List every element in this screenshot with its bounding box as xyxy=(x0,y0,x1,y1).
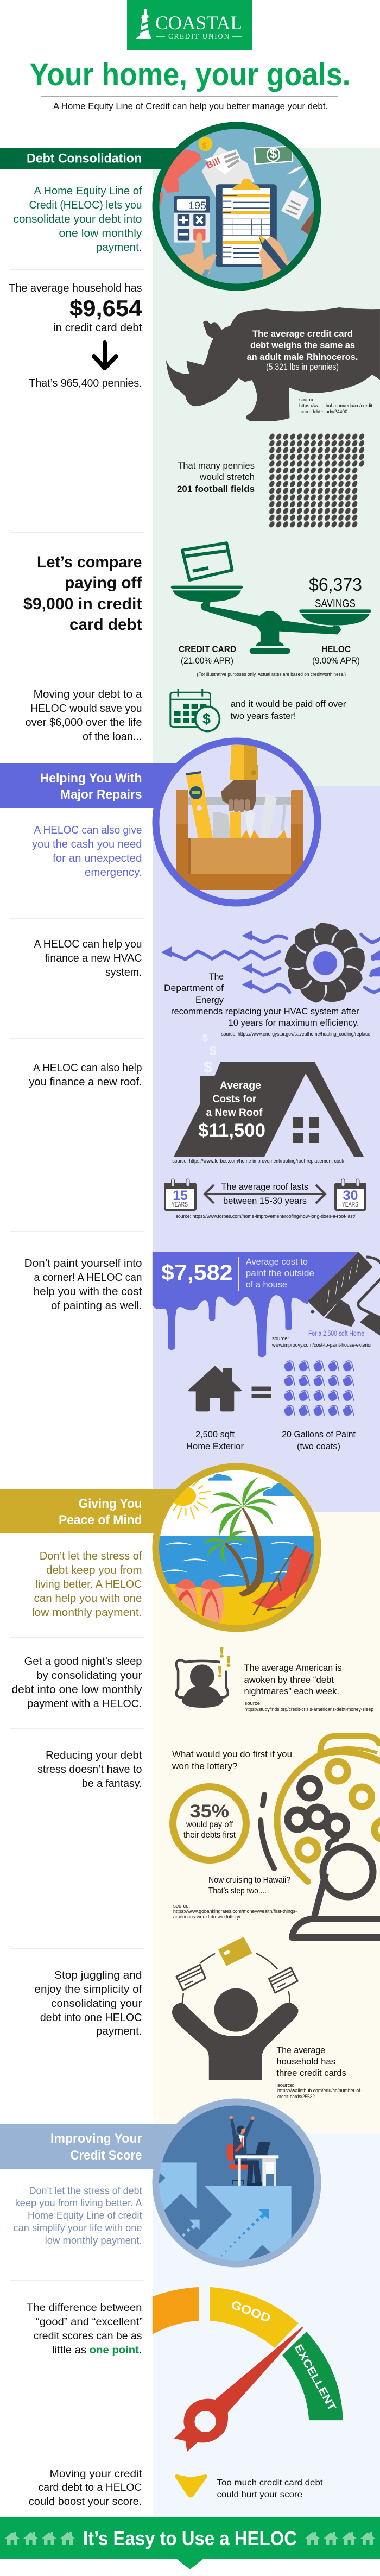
panel: major repairs background xyxy=(153,786,380,1512)
text: good versus excellent: The difference between xyxy=(27,2302,142,2314)
text: finance a new roof: you finance a new roof. xyxy=(29,1076,142,1088)
text: three credit cards: The average xyxy=(276,2045,325,2055)
section band: peace of mind xyxy=(0,1489,182,1533)
icon: calendar with dollar xyxy=(170,689,219,731)
text: reducing debt stress: Reducing your debt xyxy=(46,1749,142,1761)
illustration: balance scale: (21.00% APR) xyxy=(181,655,233,666)
source: wallethub number of cards: https://wallethub.com/edu/cc/number-of- xyxy=(277,2088,362,2094)
callout: 35 percent: 35% xyxy=(190,1801,229,1822)
title: Your home, your goals. xyxy=(29,57,351,92)
chart: credit score gauge xyxy=(153,2287,343,2452)
source: forbes roof lifespan: source: https://www.forbes.com/home-improvement/roofing/how-long-does-a-roof-last/ xyxy=(176,1214,356,1220)
text: good night's sleep: Get a good night’s sleep xyxy=(24,1655,142,1668)
text: boost your score: card debt to a HELOC xyxy=(38,2482,142,2493)
panel: peace of mind background xyxy=(153,1512,380,2133)
text: peace of mind description xyxy=(32,1550,142,1619)
arrow: roof lifespan range: The average roof lasts xyxy=(221,1182,308,1192)
text: boost your score: Moving your credit xyxy=(50,2468,142,2480)
illustration: bills and calculator in circle: Bill xyxy=(205,156,222,171)
text: HELOC intro: one low monthly xyxy=(59,227,142,239)
source: wallethub number of cards xyxy=(277,2082,362,2100)
text: stop juggling: enjoy the simplicity of xyxy=(34,1983,142,1996)
section band: it's easy to use a HELOC xyxy=(0,2517,380,2569)
icon: HVAC fan xyxy=(283,923,368,1006)
text: department of energy recommendation xyxy=(164,971,359,1028)
icon: calendar with dollar: $ xyxy=(202,711,211,727)
text: HELOC intro: A Home Equity Line of xyxy=(34,185,142,197)
arrow: roof lifespan range xyxy=(205,1182,325,1206)
illustration: house roof with cost: $11,500 xyxy=(198,1120,265,1141)
text: cruising to Hawaii xyxy=(208,1876,290,1896)
text: finance HVAC: finance a new HVAC xyxy=(45,952,142,964)
text: department of energy recommendation: Department of xyxy=(164,983,224,993)
text: let's compare: Let’s compare xyxy=(37,553,142,571)
chart: credit score gauge: GOOD xyxy=(229,2297,273,2325)
text: let's compare: $9,000 in credit xyxy=(23,595,142,613)
text: lottery question: What would you do first if you xyxy=(172,1749,292,1759)
arrow: down to pennies xyxy=(94,343,116,368)
text: department of energy recommendation: 10 years for maximum efficiency. xyxy=(228,1018,359,1028)
panel: credit score background xyxy=(153,2133,380,2519)
text: peace of mind description: Don’t let the stress of xyxy=(40,1550,142,1562)
text: house label: 2,500 sqft xyxy=(195,1429,235,1439)
text: painting: help you with the cost xyxy=(34,1285,142,1298)
source: wallethub debt study: source: xyxy=(299,397,316,403)
text: finance HVAC xyxy=(34,938,142,978)
text: football fields: That many pennies xyxy=(178,460,255,471)
text: three credit cards xyxy=(276,2045,346,2078)
text: unexpected emergency: for an unexpected xyxy=(53,852,142,864)
text: good versus excellent: credit scores can be as xyxy=(34,2330,142,2342)
text: department of energy recommendation: Energy xyxy=(195,995,224,1005)
text: HELOC intro: consolidate your debt into xyxy=(13,213,142,225)
source: forbes roof cost: source: https://www.forbes.com/home-improvement/roofing/roof-replacement-cost/ xyxy=(172,1158,344,1164)
illustration: rhino silhouette: The average credit card xyxy=(252,329,353,339)
text: paint label xyxy=(282,1429,356,1451)
text: HELOC intro: Credit (HELOC) lets you xyxy=(29,199,142,211)
panel: debt consolidation background xyxy=(153,148,380,786)
text: average household debt: $9,654 xyxy=(69,295,142,321)
source: go banking rates: source: xyxy=(173,1903,190,1909)
illustration: balance scale: CREDIT CARD xyxy=(179,644,236,654)
text: football fields: would stretch xyxy=(199,472,255,482)
text: football fields xyxy=(177,460,255,494)
icon: 30 years calendar: 30 xyxy=(343,1188,358,1203)
illustration: balance scale: (9.00% APR) xyxy=(312,655,360,666)
text: lottery question: won the lottery? xyxy=(172,1761,238,1771)
illustration: person juggling credit cards xyxy=(172,1937,298,2080)
icon: 15 years calendar xyxy=(164,1179,197,1211)
section band: peace of mind: Giving You xyxy=(79,1497,142,1511)
icon: 15 years calendar: YEARS xyxy=(172,1202,188,1208)
illustration: house roof with cost: Costs for xyxy=(213,1094,257,1105)
logo: COASTAL xyxy=(155,12,242,34)
icon: white dollar signs: $ xyxy=(202,1033,208,1044)
text: good versus excellent xyxy=(27,2302,143,2356)
section band: credit score: Improving Your xyxy=(50,2131,142,2146)
illustration: house roof with cost xyxy=(174,1062,364,1157)
text: average household debt xyxy=(9,282,142,389)
text: good night's sleep: payment with a HELOC. xyxy=(27,1697,142,1710)
illustration: paint drips and roller: Average cost to xyxy=(246,1257,308,1267)
text: finance HVAC: A HELOC can help you xyxy=(34,938,142,950)
text: unexpected emergency: you the cash you need xyxy=(32,838,142,850)
text: finance a new roof xyxy=(29,1062,142,1088)
icon: 30 years calendar: YEARS xyxy=(342,1202,358,1208)
text: house label xyxy=(186,1429,244,1451)
text: simplify your life: can simplify your life with one xyxy=(13,2222,142,2233)
text: peace of mind description: low monthly payment. xyxy=(32,1606,142,1619)
chart: credit score gauge: EXCELLENT xyxy=(292,2343,338,2413)
source: wallethub debt study: https://wallethub.com/edu/cc/credit xyxy=(299,403,372,409)
text: painting xyxy=(24,1257,142,1312)
section band: major repairs: Helping You With xyxy=(40,771,142,786)
text: unexpected emergency: A HELOC can also give xyxy=(34,824,142,836)
text: reducing debt stress: be a fantasy. xyxy=(82,1777,142,1790)
icon: house xyxy=(188,1366,242,1411)
chart: football pictogram grid xyxy=(269,433,365,528)
text: good night's sleep: by consolidating your xyxy=(36,1669,142,1682)
section band: major repairs: Major Repairs xyxy=(60,787,142,802)
source: wallethub number of cards: credit-cards/25532 xyxy=(277,2094,315,2100)
text: boost your score: could boost your score. xyxy=(29,2496,142,2508)
text: debt nightmares: awoken by three “debt xyxy=(244,1675,334,1685)
section band: it's easy to use a HELOC: It’s Easy to Use a HELOC xyxy=(83,2527,297,2549)
text: simplify your life xyxy=(13,2185,142,2246)
illustration: rhino silhouette: debt weighs the same as xyxy=(250,340,355,350)
text: painting: Don’t paint yourself into xyxy=(24,1257,142,1270)
section band: major repairs xyxy=(0,763,182,808)
text: paid off faster: and it would be paid off over xyxy=(230,699,346,709)
text: average household debt: in credit card debt xyxy=(53,321,142,334)
illustration: rhino silhouette: an adult male Rhinoceros. xyxy=(246,352,358,362)
text: let's compare xyxy=(23,553,142,634)
illustration: balance scale: SAVINGS xyxy=(315,598,356,610)
illustration: paint drips and roller: paint the outside xyxy=(246,1268,314,1278)
icon: white dollar signs: $ xyxy=(210,1044,217,1058)
source: go banking rates: https://www.gobankingrates.com/money/wealth/first-things- xyxy=(173,1909,297,1915)
text: let's compare: paying off xyxy=(65,574,142,592)
section band: debt consolidation xyxy=(0,148,182,169)
illustration: balance scale: HELOC xyxy=(321,644,351,654)
subtitle: A Home Equity Line of Credit can help you better manage your debt. xyxy=(53,101,328,111)
icon: 30 years calendar xyxy=(334,1179,366,1211)
text: boost your score xyxy=(29,2468,142,2508)
illustration: balance scale: $6,373 xyxy=(309,574,362,595)
text: department of energy recommendation: recommends replacing your HVAC system after xyxy=(171,1006,359,1016)
text: debt nightmares: The average American is xyxy=(244,1663,342,1673)
arrow: roof lifespan range: between 15-30 years xyxy=(223,1196,307,1206)
logo: CREDIT UNION xyxy=(168,32,230,40)
text: painting: a corner! A HELOC can xyxy=(34,1271,142,1284)
text: too much debt: Too much credit card debt xyxy=(217,2478,323,2487)
text: moving debt to HELOC: HELOC would save you xyxy=(30,702,142,715)
callout: 35 percent xyxy=(173,1786,246,1860)
text: HELOC intro: payment. xyxy=(96,241,142,254)
text: paint label: (two coats) xyxy=(297,1441,340,1451)
text: debt nightmares: nightmares” each week. xyxy=(244,1686,339,1696)
illustration: bills and calculator in circle: 195 xyxy=(188,200,206,212)
illustration: paint drips and roller xyxy=(153,1252,380,1357)
logo xyxy=(127,0,252,50)
source: improovy xyxy=(271,1336,372,1348)
text: simplify your life: low monthly payment. xyxy=(45,2234,142,2246)
text: department of energy recommendation: The xyxy=(209,971,224,982)
text: good versus excellent: “good” and “excellent” xyxy=(36,2316,143,2328)
text: three credit cards: three credit cards xyxy=(276,2068,346,2078)
illustration: paint drips and roller: $7,582 xyxy=(161,1261,233,1285)
text: unexpected emergency xyxy=(32,824,142,879)
text: moving debt to HELOC: of the loan... xyxy=(83,730,142,743)
illustration: rhino silhouette xyxy=(166,307,380,421)
text: house label: Home Exterior xyxy=(186,1441,244,1451)
callout: 35 percent: would pay off xyxy=(186,1820,233,1829)
section band: peace of mind: Peace of Mind xyxy=(59,1513,142,1527)
icon: white dollar signs: $ xyxy=(204,1059,212,1076)
callout: 35 percent: their debts first xyxy=(183,1830,236,1840)
text: moving debt to HELOC xyxy=(25,688,142,743)
text: stop juggling: Stop juggling and xyxy=(54,1969,142,1981)
text: simplify your life: Don’t let the stress of debt xyxy=(29,2185,142,2196)
text: simplify your life: Home Equity Line of credit xyxy=(28,2209,142,2221)
text: paint label: 20 Gallons of Paint xyxy=(282,1429,356,1439)
text: too much debt: could hurt your score xyxy=(217,2490,302,2499)
text: peace of mind description: can help you with one xyxy=(34,1592,142,1605)
icon: person on pillow with alarm marks xyxy=(176,1647,231,1708)
text: too much debt xyxy=(217,2478,323,2499)
source: improovy: www.improovy.com/cost-to-paint-house-exterior xyxy=(271,1342,372,1348)
icon: down arrow xyxy=(176,2475,206,2497)
text: let's compare: card debt xyxy=(69,616,142,634)
text: cruising to Hawaii: That’s step two.... xyxy=(208,1886,267,1896)
text: peace of mind description: debt keep you from xyxy=(46,1564,142,1576)
text: moving debt to HELOC: Moving your debt to a xyxy=(34,688,142,700)
text: finance HVAC: system. xyxy=(105,966,142,978)
text: peace of mind description: living better. A HELOC xyxy=(36,1578,142,1590)
text: simplify your life: keep you from living better. A xyxy=(15,2197,142,2208)
icon: equals sign xyxy=(252,1387,271,1398)
icon: white dollar signs xyxy=(202,1033,217,1076)
illustration: bills and calculator in circle: $ xyxy=(270,147,277,161)
chart: paint cans pictogram xyxy=(283,1360,357,1419)
text: reducing debt stress: stress doesn’t have to xyxy=(37,1763,142,1776)
text: paid off faster: two years faster! xyxy=(230,711,296,721)
illustration: house roof with cost: Average xyxy=(220,1080,261,1091)
source: wallethub number of cards: source: xyxy=(277,2082,294,2088)
icon: 15 years calendar: 15 xyxy=(173,1188,188,1203)
illustration: paint drips and roller: of a house xyxy=(246,1279,287,1290)
text: lottery question xyxy=(172,1749,292,1771)
illustration: house roof with cost: a New Roof xyxy=(206,1107,263,1119)
text: good versus excellent: little as one point. xyxy=(52,2344,142,2356)
section band: credit score: Credit Score xyxy=(71,2148,142,2163)
illustration: businessman on rising arrows xyxy=(156,2102,318,2264)
source: study finds xyxy=(244,1701,373,1713)
section band: credit score xyxy=(0,2124,182,2169)
text: debt nightmares xyxy=(244,1663,342,1696)
text: moving debt to HELOC: over $6,000 over the life xyxy=(25,716,142,729)
illustration: rhino silhouette: (5,321 lbs in pennies) xyxy=(266,362,339,372)
text: finance a new roof: A HELOC can also help xyxy=(33,1062,142,1074)
text: reducing debt stress xyxy=(37,1749,142,1790)
text: paid off faster xyxy=(230,699,346,721)
source: go banking rates xyxy=(173,1903,297,1920)
illustration: toolbox in circle xyxy=(156,741,318,903)
text: good night's sleep xyxy=(11,1655,142,1710)
text: stop juggling: consolidating your xyxy=(51,1997,142,2010)
text: painting: of painting as well. xyxy=(51,1299,142,1312)
text: cruising to Hawaii: Now cruising to Hawaii? xyxy=(208,1876,290,1885)
source: wallethub debt study xyxy=(299,397,372,415)
illustration: bills and calculator in circle: $ xyxy=(202,141,207,150)
text: HELOC intro xyxy=(13,185,142,254)
source: go banking rates: americans-would-do-win-lottery/ xyxy=(173,1914,240,1920)
text: three credit cards: household has xyxy=(276,2056,335,2067)
text: stop juggling: debt into one HELOC xyxy=(40,2011,142,2024)
illustration: bills and calculator in circle xyxy=(156,125,318,287)
text: stop juggling: payment. xyxy=(96,2025,142,2037)
source: study finds: source: xyxy=(244,1701,262,1707)
icon: HVAC airflow arrows xyxy=(161,930,380,992)
illustration: lottery machine xyxy=(261,1736,380,1937)
text: football fields: 201 football fields xyxy=(177,484,255,494)
text: stop juggling xyxy=(34,1969,142,2037)
source: wallethub debt study: -card-debt-study/24400 xyxy=(299,409,347,415)
illustration: balance scale xyxy=(171,543,371,678)
illustration: beach scene in circle xyxy=(155,1467,320,1636)
text: unexpected emergency: emergency. xyxy=(85,866,142,879)
text: good night's sleep: debt into one low monthly xyxy=(11,1683,142,1696)
source: improovy: source: xyxy=(272,1336,289,1342)
illustration: balance scale: (For illustrative purposes only. Actual rates are based on creditworthiness.) xyxy=(197,672,346,678)
text: average household debt: That’s 965,400 pennies. xyxy=(29,377,142,389)
section band: debt consolidation: Debt Consolidation xyxy=(27,151,142,166)
text: average household debt: The average household has xyxy=(9,282,142,294)
text: home size note: For a 2,500 sqft Home xyxy=(308,1329,364,1337)
